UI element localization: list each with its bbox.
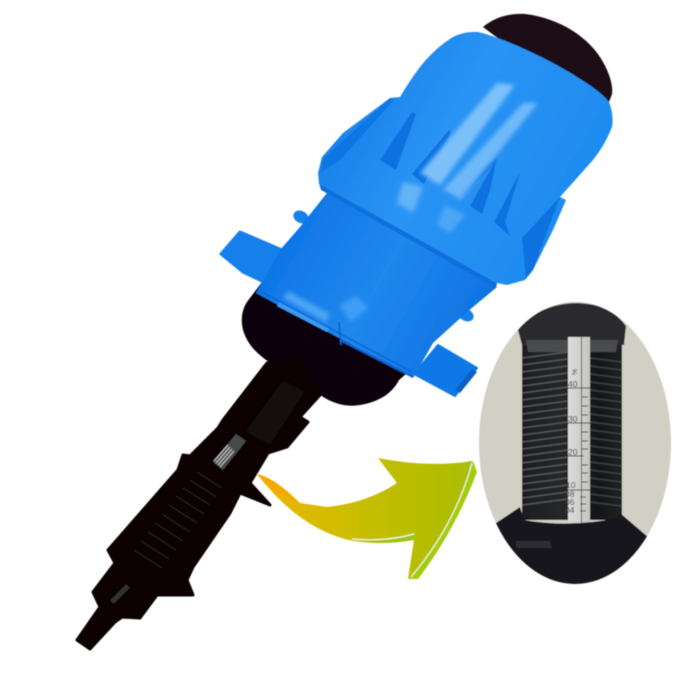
housing highlights <box>397 83 538 233</box>
neck <box>526 340 618 352</box>
scale labels: 04 <box>565 505 575 515</box>
scale labels: 10 <box>566 480 576 490</box>
nozzle opening <box>455 369 477 393</box>
scale labels: % <box>572 369 579 375</box>
column top cap <box>518 303 626 345</box>
column ribs <box>522 352 568 505</box>
flange ring <box>319 183 497 288</box>
yellow-green arrow <box>257 458 477 579</box>
arrow white edge and green rim <box>408 461 477 579</box>
right blue nozzle <box>414 345 477 396</box>
illustration: dosing pump <box>77 14 680 649</box>
small lugs <box>291 208 476 324</box>
housing fins <box>322 98 560 278</box>
inset: scale close-up photo <box>478 302 672 585</box>
ribbed column <box>522 345 622 520</box>
scale lines <box>568 388 590 511</box>
black dome cap <box>483 14 612 102</box>
lower blue body <box>256 193 497 378</box>
black injector stem <box>77 360 320 649</box>
upper blue housing <box>318 32 613 285</box>
scale labels: 40 <box>568 379 578 389</box>
arrow orange tail highlight <box>257 474 298 502</box>
scale window on stem <box>213 434 246 470</box>
inset background <box>478 302 672 584</box>
left blue nozzle <box>221 232 282 282</box>
stem lower grip highlight <box>112 586 128 602</box>
column base <box>496 506 648 585</box>
scale labels: 06 <box>565 497 575 507</box>
stem ribs <box>134 472 222 568</box>
scale labels: 20 <box>568 447 578 457</box>
scale labels <box>565 369 579 515</box>
scale labels: 30 <box>568 414 578 424</box>
lower body details <box>258 290 413 377</box>
scale labels: 08 <box>565 489 575 499</box>
black lower bowl <box>242 282 413 406</box>
scale strip <box>568 337 590 525</box>
stem sleeve highlight <box>245 380 305 445</box>
